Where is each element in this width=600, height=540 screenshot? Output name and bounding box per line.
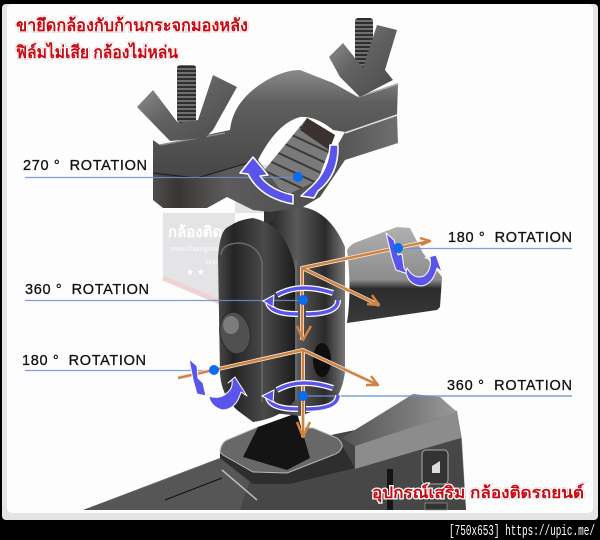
accessory caption: อุปกรณ์เสริม กล้องติดรถยนต์	[372, 483, 584, 503]
blue rotation arrow: 270	[240, 145, 338, 204]
wing nut left	[137, 75, 237, 141]
label: 180 rotation right: 180 ° ROTATION	[448, 230, 572, 246]
label: 360 rotation left: 360 ° ROTATION	[25, 282, 149, 298]
label: 270 rotation: 270 ° ROTATION	[23, 158, 147, 174]
title line 2: ฟิล์มไม่เสีย กล้องไม่หล่น	[16, 42, 178, 62]
blue rotation arrow: 360 lower	[262, 383, 338, 409]
watermark shield: กล้องติดรถยนต์	[168, 223, 268, 241]
watermark shield: since 2011	[205, 259, 238, 266]
title line 1: ขายึดกล้องกับก้านกระจกมองหลัง	[16, 16, 248, 35]
ball housing	[216, 205, 345, 422]
camera body	[83, 394, 466, 510]
wing nut right	[329, 25, 397, 97]
right side knob	[347, 227, 442, 323]
watermark shield: ★ ★	[186, 267, 205, 277]
label: 360 rotation right: 360 ° ROTATION	[447, 378, 572, 394]
blue rotation arrow: 180 right	[386, 233, 442, 286]
inner ridged strip	[262, 118, 335, 198]
blue rotation arrow: 180 left	[189, 359, 247, 410]
clamp	[137, 18, 398, 212]
blue rotation arrow: 360 upper	[263, 288, 338, 314]
blue pivot dots	[209, 172, 403, 401]
bolt left	[177, 65, 196, 123]
orange axis upper	[178, 241, 430, 437]
watermark shield	[163, 165, 285, 303]
orange axes	[178, 238, 430, 437]
mount base plate	[220, 413, 355, 484]
watermark shield: www.chiangmai.com	[169, 246, 234, 253]
label: 180 rotation left: 180 ° ROTATION	[22, 353, 146, 369]
upper strap	[153, 70, 398, 178]
bolt right	[355, 18, 373, 70]
lower clamp	[153, 115, 398, 212]
side screw	[216, 309, 254, 357]
camera button	[422, 450, 448, 484]
blue leader lines	[25, 178, 572, 396]
